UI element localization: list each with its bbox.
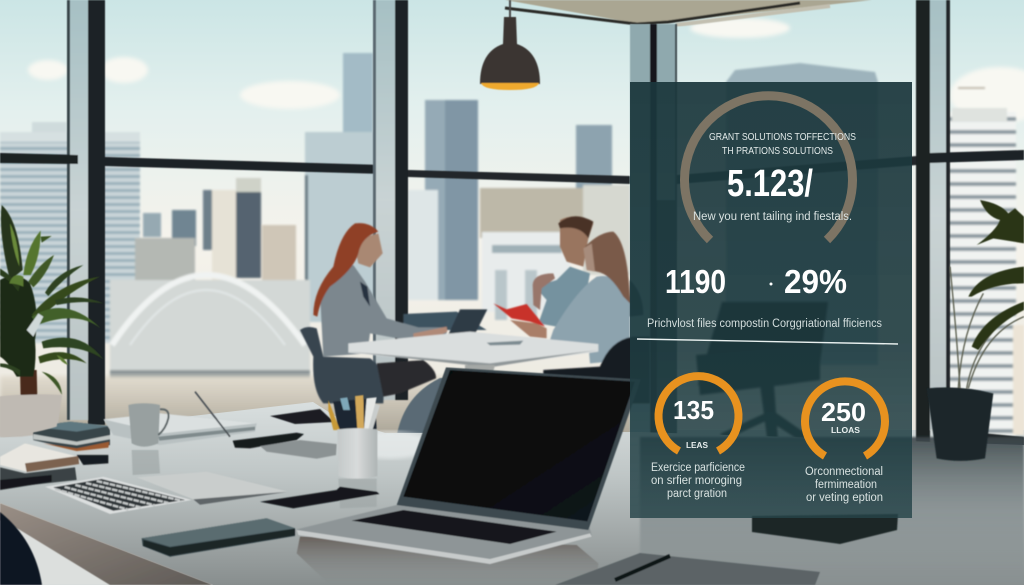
screen xyxy=(397,367,641,530)
coffee mug xyxy=(128,403,169,475)
right gauge caption xyxy=(805,466,883,504)
desk highlight xyxy=(350,431,430,459)
pencil cup xyxy=(328,395,380,508)
remote control xyxy=(233,433,304,448)
stat: 29%: 29% xyxy=(784,263,847,300)
left gauge caption: on srfier moroging xyxy=(651,475,742,487)
panel heading: GRANT SOLUTIONS TOFFECTIONS xyxy=(709,131,856,143)
right chair xyxy=(543,337,650,403)
right gauge: 250 xyxy=(821,397,866,427)
back chair xyxy=(403,312,487,330)
plant right with dark pot xyxy=(927,200,1024,461)
tablet xyxy=(260,487,379,508)
far city buildings xyxy=(0,53,1024,442)
man in blue shirt xyxy=(533,216,593,327)
right gauge caption: or veting eption xyxy=(806,492,883,504)
stats caption: Prichvlost files compostin Corggriational fficiencs xyxy=(647,318,882,330)
clouds xyxy=(28,18,1024,123)
desk edge xyxy=(0,503,213,585)
translucent stats panel xyxy=(630,82,912,518)
large gauge arc xyxy=(684,96,852,240)
paper folder xyxy=(137,472,288,504)
meeting table and people in the background xyxy=(300,216,650,403)
right gauge caption: fermimeation xyxy=(815,479,877,491)
grey chair behind the laptop xyxy=(397,378,452,436)
dark pot xyxy=(927,387,993,461)
right gauge xyxy=(805,381,885,456)
keyboard xyxy=(352,510,557,544)
phone xyxy=(77,455,108,465)
main figure caption: New you rent tailing ind fiestals. xyxy=(693,211,852,223)
pen on notebook xyxy=(615,556,670,580)
panel heading: TH PRATIONS SOLUTIONS xyxy=(722,146,833,157)
left gauge caption xyxy=(651,462,745,500)
plant left xyxy=(0,205,103,437)
red book xyxy=(493,303,545,327)
left gauge: 135 xyxy=(673,395,714,425)
left gauge caption: Exercice parficience xyxy=(651,462,745,474)
window view: sky and city skyline xyxy=(0,0,1024,442)
open book xyxy=(0,443,80,490)
panel heading xyxy=(709,131,856,157)
power bank xyxy=(142,518,295,557)
floor below desk xyxy=(0,503,213,585)
laptop on meeting table xyxy=(443,309,487,345)
window frames xyxy=(0,0,1024,448)
book stack xyxy=(33,422,110,451)
closed laptop folder xyxy=(103,413,257,445)
ceiling corner xyxy=(505,0,872,25)
foreground laptop xyxy=(297,367,641,585)
window-side planter base xyxy=(0,395,62,437)
stylus xyxy=(195,392,230,437)
pendant lamp xyxy=(480,0,540,90)
dark book xyxy=(752,514,898,544)
foreground chair xyxy=(0,512,42,585)
dark chair behind the panel xyxy=(696,302,828,446)
notebook xyxy=(260,440,337,459)
right gauge: LLOAS xyxy=(831,426,861,435)
notebook at desk edge xyxy=(555,553,820,585)
main figure: 5.123/ xyxy=(727,163,813,205)
left gauge xyxy=(658,376,739,451)
right gauge caption: Orconmectional xyxy=(805,466,883,478)
blurred floor beyond the window xyxy=(0,376,640,436)
seat shadow on desk xyxy=(270,409,334,424)
laptop reflection xyxy=(297,537,598,585)
woman with red hair xyxy=(300,223,447,403)
desk objects right xyxy=(555,514,898,585)
desk objects left xyxy=(0,392,380,557)
right side desk shading xyxy=(640,437,1024,585)
meeting table top xyxy=(348,332,598,367)
left gauge caption: parct gration xyxy=(667,488,727,500)
foreground desk xyxy=(0,402,1024,585)
woman with brown hair xyxy=(510,232,643,363)
stat: 1190: 1190 xyxy=(665,263,726,300)
left gauge: LEAS xyxy=(686,441,709,450)
laptop base xyxy=(297,505,592,564)
keyboard xyxy=(45,477,192,514)
divider xyxy=(637,339,898,344)
